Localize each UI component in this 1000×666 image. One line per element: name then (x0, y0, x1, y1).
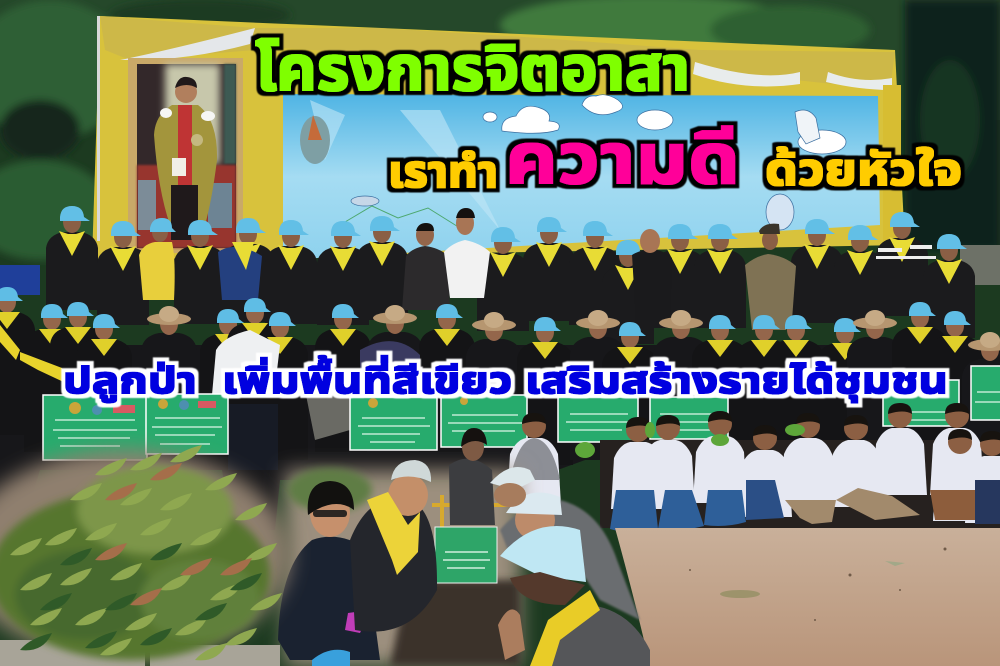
sign 4 (441, 395, 527, 447)
seedling tree photo (0, 445, 290, 666)
schoolchildren with seedlings (507, 403, 1000, 532)
front man in cap and yellow scarf (535, 605, 650, 666)
man with yellow scarf (350, 498, 437, 632)
banner: blue project backdrop (283, 94, 880, 260)
title: project name: โครงการจิตอาสา (255, 35, 690, 104)
headline word 3: ด้วยหัวใจ (765, 146, 962, 195)
dirt ground (615, 528, 1000, 666)
clouds on banner (351, 95, 846, 230)
green project signs (43, 366, 1000, 460)
striped shirt (876, 245, 936, 259)
man in dark suit (402, 246, 450, 310)
yellow fence and sign (432, 495, 520, 530)
sign 8 (971, 366, 1000, 420)
leaves (10, 445, 282, 660)
woman with yellow sash (20, 352, 70, 385)
watering can (312, 650, 350, 666)
sign 6 (650, 397, 728, 439)
yellow shirt (139, 242, 175, 300)
subtitle: reforestation, green space, community income: ปลูกป่า เพิ่มพื้นที่สีเขียว เสริมสร้างรายได้ชุมชน (63, 355, 948, 402)
man in black, no cap (632, 249, 672, 320)
blue shirt (218, 247, 262, 300)
rear man in cap (500, 500, 640, 620)
woman in navy jacket (278, 537, 380, 660)
white shirt man (212, 330, 280, 396)
headline: we do good with heart (388, 120, 962, 198)
planting scene: officials and workers (278, 428, 650, 666)
back row of volunteers (46, 206, 975, 344)
sign 5 (558, 397, 638, 442)
seated girl group (611, 417, 665, 509)
standing woman behind (449, 459, 495, 525)
sign 2 (146, 394, 228, 454)
stage backdrop: yellow drapes (92, 16, 905, 260)
purple shirt (360, 341, 420, 380)
royal portrait (128, 58, 243, 253)
police officer (745, 254, 796, 330)
sign 3 (350, 397, 437, 450)
checked shirt (306, 395, 350, 440)
headline word 1: เราทำ (388, 148, 498, 197)
middle rows of volunteers (0, 287, 1000, 530)
headline word 2: ความดี (505, 120, 740, 198)
sign 7 (883, 380, 959, 426)
sign 1 (43, 395, 147, 460)
man in white shirt (444, 240, 490, 298)
